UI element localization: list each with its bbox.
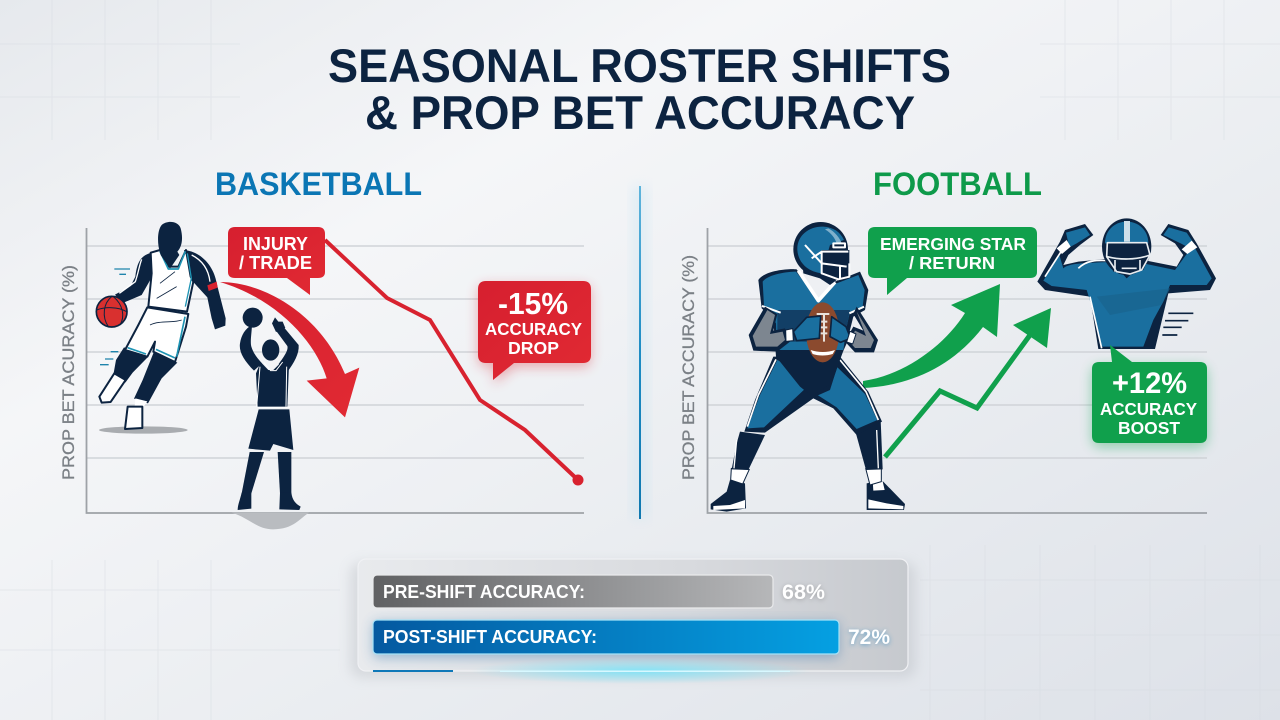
bar: pre-shift accuracy: PRE-SHIFT ACCURACY: [383,581,585,602]
value: 68%: 68% [782,582,825,605]
title: SEASONAL ROSTER SHIFTS [328,39,951,92]
football gridlines and axes [707,228,1207,513]
panel: accuracy comparison [350,559,916,684]
icon: defender silhouette [238,308,301,510]
basketball gridlines and axes [86,228,584,513]
callout: injury / trade [228,227,325,295]
progress line and glow [373,658,810,684]
bar: post-shift accuracy: POST-SHIFT ACCURACY: [383,626,597,647]
bar: pre-shift accuracy [373,575,773,608]
callout: emerging star / return: EMERGING STAR [880,234,1026,254]
players and swoosh, drawn in a 3x local grid [96,222,359,529]
callout: -15% accuracy drop: -15% [498,286,568,321]
callout: +12% accuracy boost: ACCURACY [1100,399,1197,419]
value: 72%: 72% [848,626,890,649]
panel: football chart [679,218,1216,513]
callout: injury / trade: / TRADE [239,252,312,273]
title [328,39,951,139]
arrow: thin green zigzag [885,308,1051,457]
callout: -15% accuracy drop [478,281,591,384]
panel: basketball chart [59,222,591,529]
callout: -15% accuracy drop: ACCURACY [485,319,582,339]
heading: football: FOOTBALL [873,166,1042,202]
callout: +12% accuracy boost [1092,345,1207,447]
center divider [632,186,648,519]
icon: quarterback holding football [711,222,905,512]
bar: post-shift accuracy [373,620,839,658]
shadow under dribbler [99,426,188,434]
icon: flexing football player [1037,218,1216,349]
callout: emerging star / return: / RETURN [909,253,995,273]
y axis label: basketball: PROP BET ACURACY (%) [59,265,78,480]
value: 68%: 68% [782,581,825,604]
shadow under defender [232,513,309,529]
value: 72%: 72% [848,627,890,650]
red decline line [325,240,584,486]
callout: +12% accuracy boost: BOOST [1118,418,1180,438]
y axis label: football: PROP BET ACCURACY (%) [679,255,698,480]
heading: basketball: BASKETBALL [215,166,422,202]
arrow: thick green curve [863,284,1000,388]
callout: +12% accuracy boost: +12% [1112,367,1187,400]
arrow: red downward swoosh [220,282,359,417]
title: & PROP BET ACCURACY [365,86,915,139]
callout: emerging star / return [868,227,1037,295]
callout: injury / trade: INJURY [243,233,309,254]
callout: -15% accuracy drop: DROP [508,338,559,358]
icon: dribbling basketball player [96,222,226,429]
